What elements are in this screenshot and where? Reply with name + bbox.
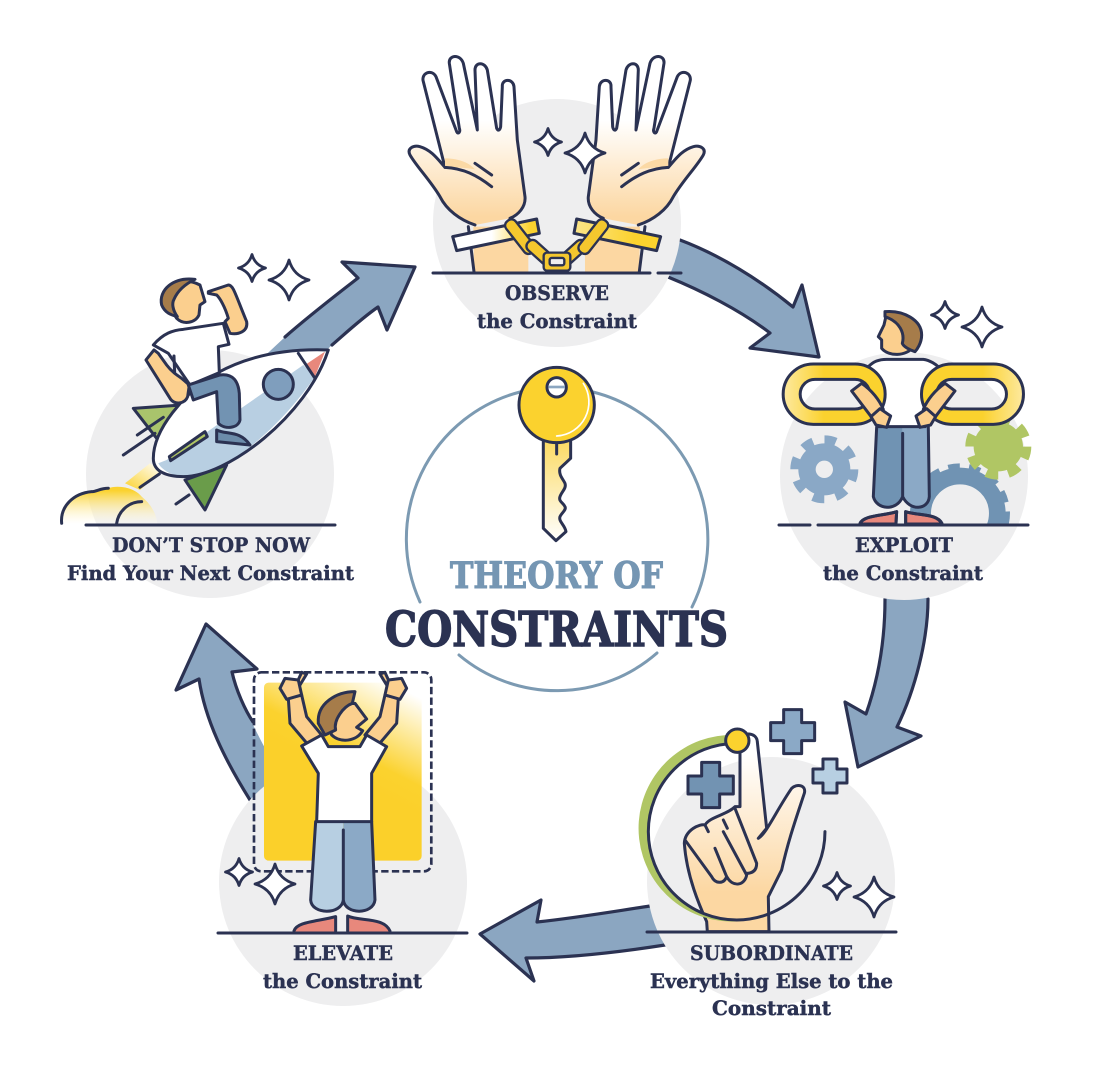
dashed frame	[254, 672, 431, 871]
sparkle: large	[565, 133, 605, 173]
icon: gears	[790, 420, 1032, 524]
plus sign: medium	[771, 710, 815, 754]
rocket body	[153, 350, 328, 477]
green gear	[970, 419, 1026, 475]
label line 1: DON’T STOP NOW	[112, 533, 311, 557]
sparkle: small	[824, 872, 850, 900]
exhaust flame	[125, 463, 162, 490]
hand	[684, 734, 805, 932]
ground line	[779, 524, 1028, 526]
label: don't stop now	[67, 533, 355, 585]
background circle	[647, 757, 895, 1005]
sparkle: small	[534, 128, 562, 156]
navy orbit arc	[648, 743, 825, 920]
right chain link	[921, 364, 1023, 424]
large gear	[910, 463, 1010, 524]
small gear	[795, 440, 853, 498]
rocket slit	[169, 432, 207, 461]
label line 2: the Constraint	[263, 969, 423, 993]
sparkle: large	[962, 307, 1002, 347]
icon: golden key	[519, 367, 594, 541]
ground line	[433, 272, 681, 274]
shoes	[294, 916, 390, 932]
arrow: elevate to rocket	[176, 624, 290, 830]
shirt	[868, 359, 939, 427]
rear arm	[146, 350, 189, 403]
left arm	[852, 383, 891, 427]
central ring around title	[406, 392, 708, 691]
speed lines	[123, 417, 189, 504]
ground line	[218, 932, 467, 934]
arrow: observe to exploit	[640, 225, 819, 357]
title line: theory of: THEORY OF	[450, 555, 663, 597]
label line 2: the Constraint	[477, 309, 638, 333]
label line 2: Find Your Next Constraint	[67, 561, 355, 585]
head	[878, 313, 920, 354]
title line: constraints: CONSTRAINTS	[385, 602, 728, 658]
top fin	[133, 405, 182, 438]
label: observe	[477, 281, 638, 333]
panel: don't stop now	[62, 254, 355, 598]
icon: man riding rocket	[62, 279, 328, 524]
head	[327, 703, 367, 740]
shoes	[860, 512, 942, 524]
raised arm	[208, 285, 247, 334]
label line 2: the Constraint	[823, 561, 984, 585]
background circle	[780, 352, 1028, 600]
shoe	[217, 430, 250, 445]
sparkle: small	[932, 302, 958, 328]
shirt	[302, 735, 387, 822]
infographic: theory of constraints cycle	[60, 55, 1032, 1016]
ground line	[86, 524, 335, 526]
background circle	[86, 350, 334, 598]
yellow dot	[726, 729, 749, 752]
head	[165, 281, 205, 322]
label line 1: ELEVATE	[293, 941, 393, 965]
title	[385, 555, 728, 658]
bottom fin	[185, 465, 227, 510]
icon: man breaking chain	[783, 311, 1023, 524]
label: exploit	[823, 533, 984, 585]
arrow: exploit to subordinate	[845, 585, 928, 767]
left hand	[409, 56, 539, 272]
smoke cloud	[62, 487, 157, 524]
right arm	[916, 383, 955, 427]
left chain link	[783, 364, 885, 424]
label: subordinate	[650, 941, 893, 1020]
leg	[188, 375, 240, 427]
trousers	[873, 427, 929, 507]
background circle	[433, 99, 681, 347]
label line 1: OBSERVE	[505, 281, 609, 305]
green arc	[639, 735, 824, 922]
ground line	[647, 930, 896, 934]
hair	[161, 279, 195, 317]
right arm	[365, 672, 407, 745]
label line 1: SUBORDINATE	[690, 941, 853, 965]
background circle	[219, 758, 467, 1006]
sparkle: small	[226, 858, 252, 886]
label line 3: Constraint	[712, 996, 832, 1020]
label line 1: EXPLOIT	[855, 533, 953, 557]
arrow: rocket to observe	[255, 262, 415, 375]
shirt	[153, 323, 229, 385]
sparkle: large	[255, 864, 295, 904]
label line 2: Everything Else to the	[650, 969, 893, 993]
plus sign: dark	[688, 762, 733, 808]
left arm	[280, 672, 322, 745]
icon: hand with plus signs	[639, 710, 847, 932]
label: elevate	[263, 941, 423, 993]
rocket window	[263, 369, 293, 399]
hair	[885, 311, 922, 352]
yellow wall	[264, 683, 422, 861]
panel: observe	[409, 56, 704, 347]
panel: elevate	[218, 672, 467, 1006]
hair	[318, 692, 355, 735]
panel: exploit	[779, 302, 1028, 600]
icon: chained hands	[409, 56, 704, 272]
chain links	[503, 217, 610, 271]
sparkle: small	[238, 254, 266, 282]
arrow: subordinate to elevate	[480, 900, 690, 981]
plus sign: light	[813, 759, 847, 793]
panel: subordinate	[639, 710, 896, 1020]
icon: man lifting frame	[254, 672, 431, 932]
sparkle: large	[269, 260, 309, 300]
trousers	[311, 822, 375, 911]
sparkle: large	[854, 877, 894, 917]
right hand	[574, 56, 704, 272]
shirt crease	[169, 356, 179, 373]
